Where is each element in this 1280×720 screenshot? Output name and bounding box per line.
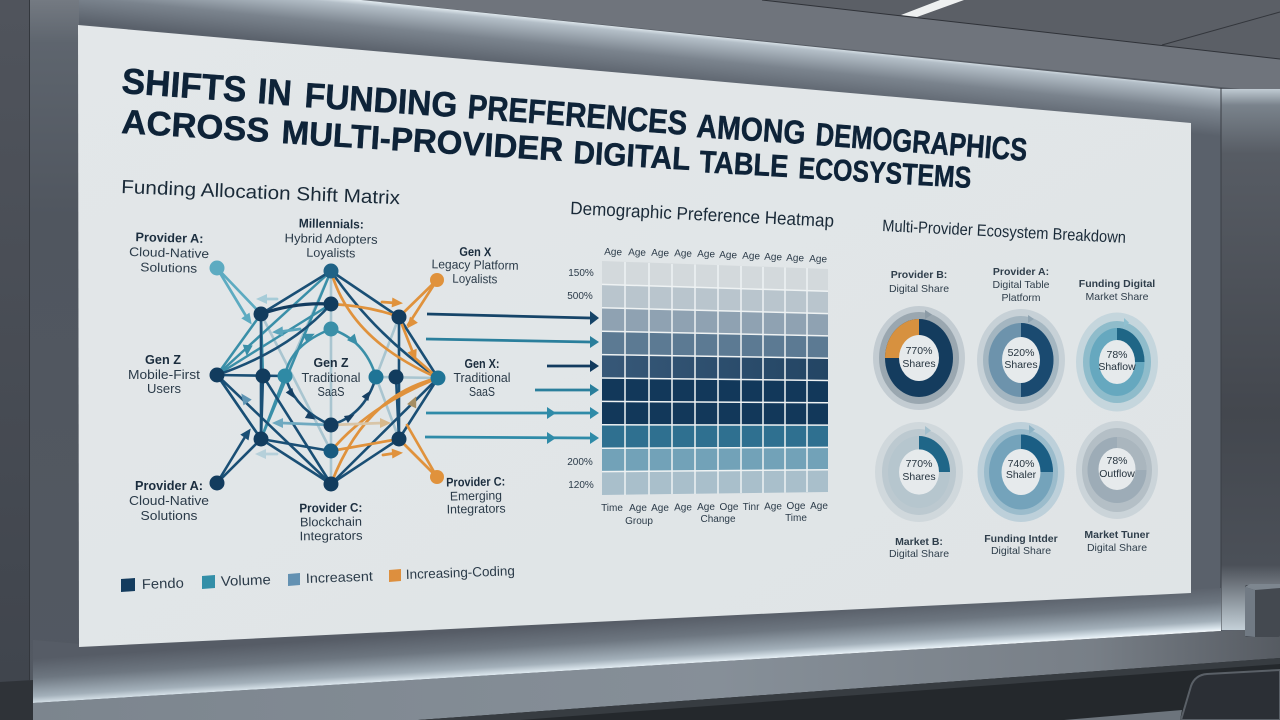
donut 3: Shaflow [1098,361,1136,373]
label: provider a top: Provider A: [135,230,204,246]
donut 4: Market B: [895,536,943,548]
label: provider a top [129,230,210,276]
heatmap top labels: Age [651,248,670,259]
donut 5 [978,422,1064,557]
label: provider c right [446,474,506,517]
donut 4: Shares [902,471,936,483]
label: gen x right: SaaS [469,385,495,399]
label: provider a bottom: Provider A: [135,479,203,493]
heatmap top labels: Age [809,254,828,265]
donut 2: 520% [1008,347,1034,359]
heatmap bottom labels: Age [697,502,715,513]
label: provider c right: Provider C: [446,474,505,490]
donut 2 [977,266,1065,411]
donut 6: Outflow [1099,468,1135,480]
label: provider c bottom: Provider C: [299,501,362,515]
title: AMONG [696,107,807,151]
title: ACROSS [121,103,271,150]
legend item: increasent: Increasent [306,569,373,586]
label: millennials [284,216,378,261]
heatmap bottom labels: Oge [787,501,806,512]
label: gen x top: Legacy Platform [431,257,519,273]
title: MULTI-PROVIDER [281,113,564,168]
label: gen z left: Mobile-First [128,368,201,382]
label: gen z left [128,353,201,396]
label: provider c right: Integrators [447,501,506,517]
network diagram [210,260,446,492]
legend item: volume [202,571,271,589]
label: provider a top: Solutions [140,260,197,276]
donut 2: Platform [1001,292,1041,304]
label: gen x right [454,357,510,399]
donut 6 [1076,421,1158,554]
label: gen x right: Traditional [454,371,510,385]
label: gen z center: Gen Z [314,356,349,370]
label: provider c bottom: Blockchain [300,515,362,529]
donut 1: Shares [902,358,936,370]
donut 1: 770% [906,345,932,357]
arrow 3 [547,360,599,372]
donut 1: Provider B: [891,269,947,281]
heatmap y labels: 120% [568,480,594,491]
arrow 6 [425,432,599,444]
donut 2: Shares [1004,359,1038,371]
donut 1 [873,269,965,410]
label: millennials: Millennials: [299,216,364,232]
title: FUNDING [303,76,459,125]
heatmap [567,247,828,527]
label: gen x top [431,244,519,287]
donut 2: Digital Table [992,279,1050,291]
heatmap y labels: 500% [567,291,593,302]
heatmap top labels: Age [604,247,623,258]
legend [121,563,515,592]
heatmap bottom labels [601,501,828,527]
heatmap top labels: Age [786,253,805,264]
label: gen z left: Users [147,382,181,396]
heatmap bottom labels: Time [601,503,623,514]
heatmap bottom labels: Age [651,503,669,514]
title: SHIFTS [120,60,248,110]
donut 5: Digital Share [991,545,1051,557]
donut 6: 78% [1106,455,1128,467]
title: TABLE [699,144,789,184]
legend item: volume: Volume [221,571,271,589]
donut 4: Digital Share [889,548,949,560]
heatmap bottom labels: Age [674,502,692,514]
arrowheads [237,294,421,459]
arrow 5 [426,407,599,419]
network labels [128,216,519,543]
donut 3: Funding Digital [1079,278,1155,290]
donut 3 [1076,278,1158,412]
heatmap top labels: Age [742,251,761,262]
pale edges [261,271,438,484]
label: millennials: Loyalists [306,246,355,260]
heatmap bottom labels: Age [810,501,828,512]
donut 4: 770% [906,458,932,470]
title: PREFERENCES [466,88,689,143]
legend item: increasing-coding: Increasing-Coding [406,563,515,582]
title: IN [256,70,293,113]
heatmap bottom labels: Group [625,516,653,527]
heading: multi-provider ecosystem breakdown: Multi-Provider Ecosystem Breakdown [882,217,1126,247]
heading: demographic preference heatmap: Demographic Preference Heatmap [570,198,834,231]
desk box right [1245,584,1280,637]
arrow 1 [427,311,599,325]
heatmap bottom labels: Age [764,502,782,512]
donut 4 [875,422,963,560]
heatmap bottom labels: Age [629,503,647,514]
teal edges [217,271,376,439]
heatmap bottom labels: Change [700,514,736,525]
label: provider a bottom [129,479,209,523]
short arrow stems [262,299,396,455]
label: gen x top: Loyalists [452,272,497,286]
donut 3: Market Share [1085,291,1149,303]
donut 1: Digital Share [889,283,949,295]
navy edges [217,271,438,484]
legend item: fendo: Fendo [142,575,184,592]
heatmap y labels: 150% [568,268,594,279]
connector arrows to heatmap [425,311,599,444]
title: ECOSYSTEMS [798,152,972,195]
label: gen z left: Gen Z [145,353,181,367]
label: provider a bottom: Solutions [140,509,198,523]
label: provider c bottom: Integrators [300,529,363,543]
donut 5: 740% [1008,458,1034,470]
heatmap y labels [567,268,594,491]
title: DEMOGRAPHICS [814,116,1029,168]
heatmap bottom labels: Tinr [743,502,760,513]
heatmap grid lines [602,262,828,495]
heatmap top labels [604,247,828,265]
title: DIGITAL [573,134,692,177]
light teal edges [217,268,261,321]
chair back [1181,670,1280,720]
label: gen z center: SaaS [318,385,344,399]
orange edges [331,271,438,484]
donut 6: Market Tuner [1084,529,1150,541]
display panel [78,25,1191,647]
donut 6: Digital Share [1087,542,1147,554]
heatmap top labels: Age [628,247,647,259]
label: provider c bottom [299,501,363,543]
label: gen x right: Gen X: [464,357,500,371]
donut 2: Provider A: [993,266,1049,278]
label: gen z center: Traditional [302,371,360,385]
label: millennials: Hybrid Adopters [284,231,378,247]
heatmap top labels: Age [697,249,716,260]
donut 5: Shaler [1006,469,1037,481]
label: gen x top: Gen X [459,245,492,259]
desk box left [0,680,33,720]
heatmap top labels: Age [674,248,693,260]
donut 5: Funding Intder [984,533,1058,545]
arrow 2 [426,336,599,348]
label: provider c right: Emerging [450,489,502,503]
label: provider a top: Cloud-Native [129,245,209,261]
heatmap bottom labels: Oge [720,502,739,513]
title [120,60,1029,195]
donut 3: 78% [1106,349,1128,361]
heatmap rows [602,261,828,495]
heading: funding allocation shift matrix: Funding Allocation Shift Matrix [121,177,401,209]
heatmap bottom labels: Time [785,513,807,524]
network nodes [210,260,446,492]
arrow 4 [535,384,599,396]
label: provider a bottom: Cloud-Native [129,494,209,508]
legend item: fendo [121,575,184,592]
heatmap top labels: Age [719,250,738,261]
label: gen z center [302,356,360,399]
heatmap y labels: 200% [567,457,593,468]
heatmap top labels: Age [764,252,783,263]
